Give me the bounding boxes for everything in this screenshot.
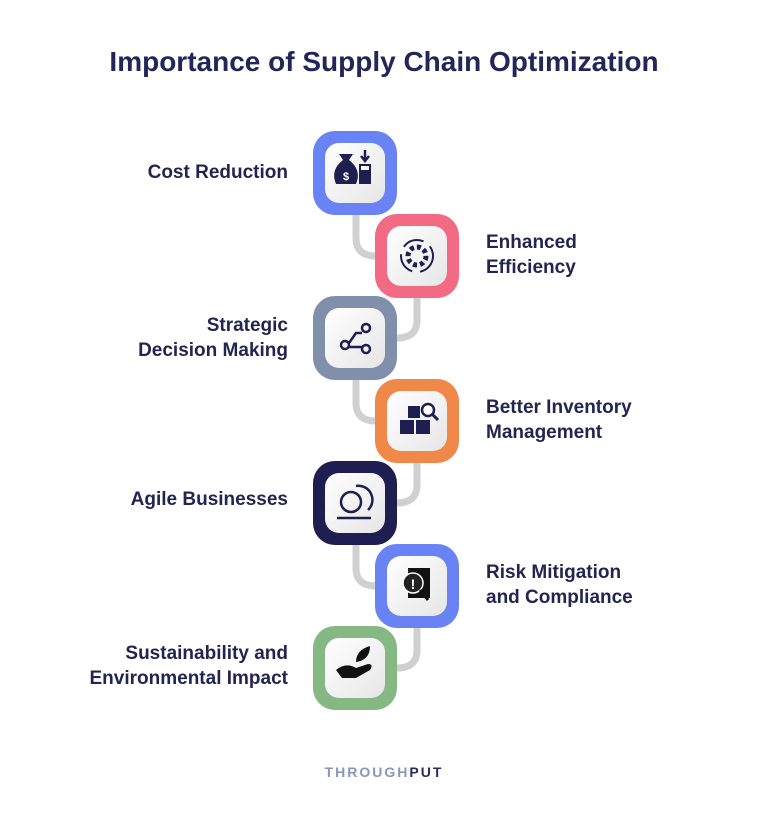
box: sustainability bbox=[313, 626, 397, 710]
label: better inventory management bbox=[486, 397, 632, 443]
box: cost reduction: $ bbox=[343, 171, 349, 183]
label: sustainability bbox=[90, 643, 288, 689]
title: Importance of Supply Chain Optimization bbox=[109, 46, 659, 77]
label: risk mitigation: and Compliance bbox=[486, 587, 633, 608]
label: cost reduction: Cost Reduction bbox=[148, 162, 288, 183]
label: enhanced efficiency bbox=[486, 232, 577, 278]
label: agile businesses: Agile Businesses bbox=[131, 489, 288, 510]
box: better inventory bbox=[375, 379, 459, 463]
logo: THROUGHPUT bbox=[325, 764, 443, 780]
label: strategic decision making: Decision Making bbox=[138, 340, 288, 361]
label: strategic decision making: Strategic bbox=[207, 315, 288, 336]
label: strategic decision making bbox=[138, 315, 288, 361]
label: enhanced efficiency: Enhanced bbox=[486, 232, 577, 253]
label: risk mitigation: Risk Mitigation bbox=[486, 562, 621, 583]
box: risk mitigation bbox=[375, 544, 459, 628]
box: cost reduction bbox=[313, 131, 397, 215]
box: agile businesses bbox=[313, 461, 397, 545]
box: strategic decision making bbox=[313, 296, 397, 380]
box: risk mitigation: ! bbox=[411, 576, 415, 592]
label: sustainability: Environmental Impact bbox=[90, 668, 288, 689]
label: sustainability: Sustainability and bbox=[125, 643, 288, 664]
box: enhanced efficiency bbox=[375, 214, 459, 298]
label: enhanced efficiency: Efficiency bbox=[486, 257, 576, 278]
label: better inventory management: Better Inventory bbox=[486, 397, 632, 418]
label: risk mitigation bbox=[486, 562, 633, 608]
label: better inventory management: Management bbox=[486, 422, 602, 443]
